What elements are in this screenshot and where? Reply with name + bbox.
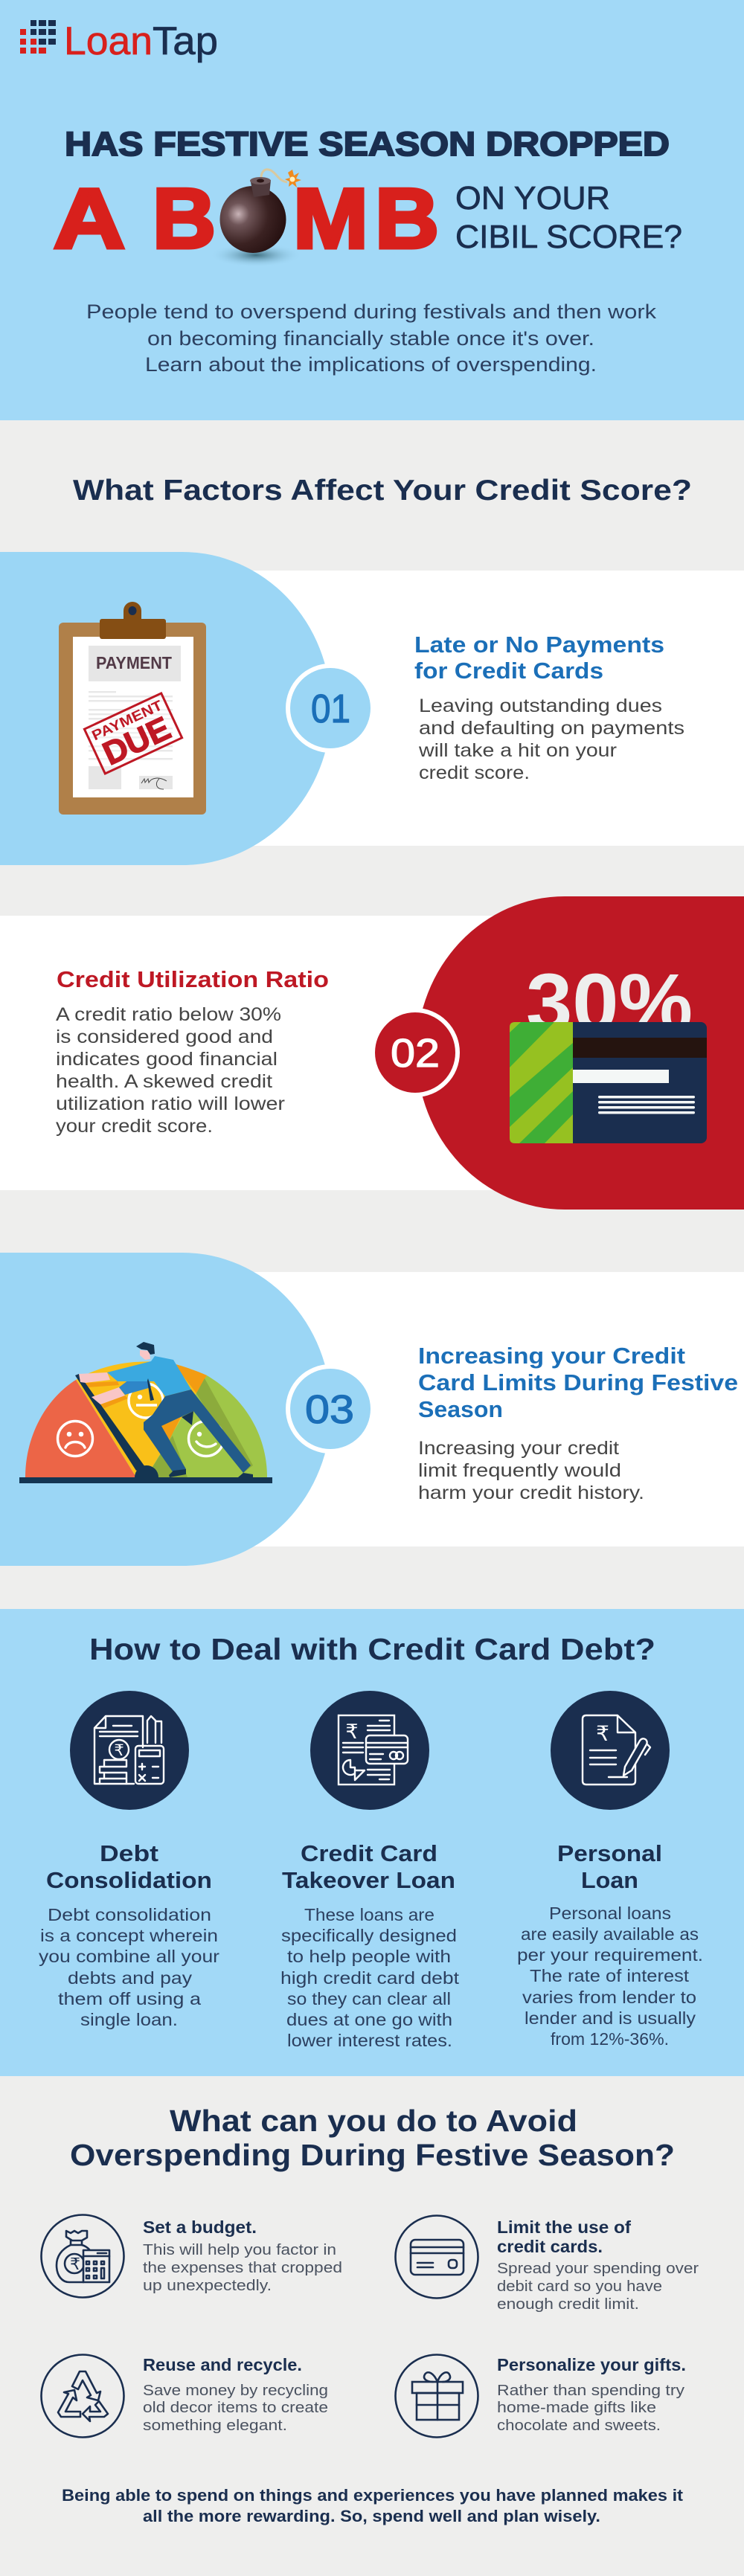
- text block: factor 02: health. A skewed credit: [56, 1071, 272, 1092]
- tip: personalize your gifts: Personalize your gifts.: [497, 2355, 686, 2374]
- column: credit card takeover loan: so they can clear all: [287, 1989, 451, 2008]
- column: debt consolidation: you combine all your: [39, 1947, 219, 1966]
- number badge 02: 02: [391, 1031, 440, 1076]
- text: 30 percent: 30%: [526, 957, 693, 1049]
- panel: factor 03: [0, 1253, 744, 1566]
- tip: limit the use of credit cards: Spread your spending over: [497, 2260, 699, 2277]
- icon: personal loan: [551, 1691, 670, 1810]
- intro paragraph: People tend to overspend during festivals and then work: [86, 301, 657, 323]
- column: credit card takeover loan: dues at one go with: [286, 2010, 452, 2029]
- column: debt consolidation: [39, 1840, 219, 2029]
- column: personal loan: Personal: [557, 1840, 662, 1866]
- gauge needle and base: [19, 1374, 272, 1483]
- text block: factor 01: will take a hit on your: [418, 740, 617, 761]
- text block: factor 01: and defaulting on payments: [419, 718, 684, 739]
- text block: factor 02: [56, 1004, 285, 1137]
- column: personal loan: lender and is usually: [525, 2008, 696, 2028]
- tip: set a budget: the expenses that cropped: [143, 2259, 342, 2276]
- column: personal loan: varies from lender to: [522, 1988, 696, 2007]
- face: neutral: [129, 1384, 163, 1418]
- text block: factor 03: [418, 1438, 644, 1503]
- heading: increasing your credit card limits: Season: [418, 1396, 503, 1422]
- title: A BOMB: [54, 170, 439, 267]
- heading: what can you do to avoid overspending: What can you do to Avoid: [170, 2104, 577, 2138]
- panel: factor 02: [0, 896, 744, 1210]
- heading: credit utilization ratio: Credit Utilization Ratio: [57, 966, 329, 992]
- column: personal loan: The rate of interest: [530, 1966, 689, 1985]
- icon: credit card takeover loan: [310, 1691, 429, 1810]
- tip: set a budget: This will help you factor in: [143, 2241, 336, 2258]
- heading: how to deal: How to Deal with Credit Card Debt?: [89, 1632, 655, 1666]
- column: debt consolidation: Debt: [100, 1840, 158, 1866]
- tip: limit the use of credit cards: credit cards.: [497, 2237, 603, 2256]
- icon: credit card takeover loan: ₹: [345, 1721, 359, 1743]
- text block: factor 02: is considered good and: [56, 1027, 273, 1047]
- column: personal loan: Personal loans: [549, 1904, 671, 1923]
- panel: how to deal with credit card debt: [0, 1609, 744, 2076]
- intro paragraph: Learn about the implications of overspending.: [145, 353, 597, 376]
- icon: clipboard payment due: [59, 602, 206, 815]
- text block: factor 02: your credit score.: [56, 1116, 213, 1137]
- heading: increasing your credit card limits: Increasing your Credit: [418, 1343, 685, 1369]
- logo: LoanTap: [20, 19, 218, 63]
- tip: limit the use of credit cards: Limit the use of: [497, 2217, 631, 2237]
- panel: factor 01: [0, 552, 744, 865]
- stamp: payment due: PAYMENT: [90, 698, 165, 744]
- closing statement: all the more rewarding. So, spend well and plan wisely.: [143, 2507, 600, 2525]
- tip: set a budget: up unexpectedly.: [143, 2277, 272, 2294]
- column: credit card takeover loan: [280, 1840, 460, 2050]
- title: A BOMB: B: [153, 172, 216, 266]
- icon: debt consolidation: ₹: [114, 1742, 124, 1759]
- intro paragraph: on becoming financially stable once it's over.: [147, 327, 594, 350]
- number badge 03: 03: [305, 1387, 354, 1432]
- number badge 03: [286, 1364, 375, 1454]
- title: on your cibil score: ON YOUR: [455, 180, 610, 216]
- text block: factor 01: credit score.: [419, 762, 530, 783]
- icon: card outline: [396, 2215, 478, 2299]
- heading: increasing your credit card limits: [418, 1343, 738, 1422]
- icon: recycle arrows: [42, 2355, 124, 2437]
- number badge 02: [371, 1008, 460, 1097]
- text block: factor 01: [418, 696, 684, 783]
- stamp: payment due: DUE: [97, 710, 176, 772]
- tip: reuse and recycle: old decor items to create: [143, 2399, 328, 2416]
- column: debt consolidation: is a concept wherein: [40, 1926, 218, 1945]
- column: credit card takeover loan: specifically designed: [281, 1926, 457, 1945]
- tip: personalize your gifts: home-made gifts like: [497, 2399, 656, 2416]
- tip: set a budget: Set a budget.: [143, 2217, 257, 2237]
- column: personal loan: are easily available as: [521, 1924, 699, 1944]
- person: [79, 1342, 253, 1477]
- tip: personalize your gifts: chocolate and sweets.: [497, 2417, 661, 2434]
- text block: factor 02: utilization ratio will lower: [56, 1093, 285, 1114]
- title: on your cibil score: CIBIL SCORE?: [455, 219, 682, 255]
- text block: factor 03: Increasing your credit: [418, 1438, 619, 1459]
- tip: personalize your gifts: Rather than spending try: [497, 2382, 685, 2399]
- tip: reuse and recycle: [42, 2355, 328, 2437]
- heading: what can you do to avoid overspending: Overspending During Festive Season?: [70, 2138, 675, 2172]
- title: on your cibil score: [455, 180, 682, 255]
- column: debt consolidation: debts and pay: [68, 1968, 192, 1988]
- icon: money bag and calculator: [42, 2215, 124, 2297]
- closing statement: [62, 2486, 684, 2525]
- column: debt consolidation: Consolidation: [46, 1867, 212, 1893]
- title: A BOMB: A: [54, 172, 125, 266]
- text block: factor 01: Leaving outstanding dues: [419, 696, 662, 716]
- column: debt consolidation: them off using a: [58, 1989, 202, 2008]
- column: debt consolidation: Debt consolidation: [48, 1905, 211, 1924]
- column: credit card takeover loan: high credit card debt: [280, 1968, 460, 1988]
- column: personal loan: [517, 1840, 703, 2049]
- face: happy: [189, 1421, 223, 1456]
- column: credit card takeover loan: These loans are: [304, 1905, 434, 1924]
- text block: factor 02: A credit ratio below 30%: [56, 1004, 281, 1025]
- heading: what factors: What Factors Affect Your Credit Score?: [73, 475, 692, 507]
- column: credit card takeover loan: lower interest rates.: [287, 2031, 452, 2050]
- column: debt consolidation: single loan.: [80, 2010, 178, 2029]
- tip: limit the use of credit cards: enough credit limit.: [497, 2296, 639, 2313]
- logo: LoanTap: Tap: [153, 19, 218, 63]
- column: personal loan: Loan: [581, 1867, 638, 1893]
- column: credit card takeover loan: Takeover Loan: [282, 1867, 455, 1893]
- number badge 01: [286, 664, 375, 753]
- tip: reuse and recycle: something elegant.: [143, 2417, 287, 2434]
- column: credit card takeover loan: Credit Card: [301, 1840, 437, 1866]
- heading: late or no payments: for Credit Cards: [414, 658, 603, 684]
- intro paragraph: [86, 301, 657, 376]
- title: A BOMB: M: [293, 172, 368, 266]
- heading: late or no payments: Late or No Payments: [414, 632, 664, 658]
- heading: what can you do to avoid overspending: [70, 2104, 675, 2172]
- column: credit card takeover loan: to help people with: [287, 1947, 451, 1966]
- icon: bomb: [210, 170, 302, 267]
- title line: Has festive season dropped: HAS FESTIVE SEASON DROPPED: [65, 125, 670, 163]
- icon: credit card: [510, 1022, 707, 1143]
- tip: reuse and recycle: Save money by recycling: [143, 2382, 328, 2399]
- icon: personal loan: ₹: [596, 1722, 609, 1745]
- heading: increasing your credit card limits: Card Limits During Festive: [418, 1369, 738, 1395]
- heading: late or no payments: [414, 632, 664, 684]
- illustration: man pushing credit score gauge: [19, 1342, 272, 1483]
- tip: limit the use of credit cards: [396, 2215, 699, 2313]
- text block: factor 03: limit frequently would: [418, 1460, 621, 1481]
- logo: LoanTap: Loan: [64, 19, 153, 63]
- text block: factor 03: harm your credit history.: [418, 1483, 644, 1503]
- column: personal loan: per your requirement.: [517, 1945, 703, 1965]
- stamp: payment due: [84, 693, 183, 776]
- title: A BOMB: B: [375, 172, 439, 266]
- icon: clipboard payment due: PAYMENT: [96, 653, 172, 672]
- icon: debt consolidation: [70, 1691, 189, 1810]
- icon: gift box: [396, 2355, 478, 2437]
- face: sad: [58, 1421, 92, 1456]
- number badge 01: 01: [311, 687, 350, 731]
- tip: limit the use of credit cards: debit card so you have: [497, 2278, 662, 2295]
- icon: money bag and calculator: ₹: [70, 2255, 80, 2273]
- tip: set a budget: [42, 2215, 342, 2297]
- text block: factor 02: indicates good financial: [56, 1049, 278, 1070]
- tip: personalize your gifts: [396, 2355, 686, 2437]
- tip: reuse and recycle: Reuse and recycle.: [143, 2355, 302, 2374]
- column: personal loan: from 12%-36%.: [551, 2029, 669, 2049]
- closing statement: Being able to spend on things and experiences you have planned makes it: [62, 2486, 684, 2505]
